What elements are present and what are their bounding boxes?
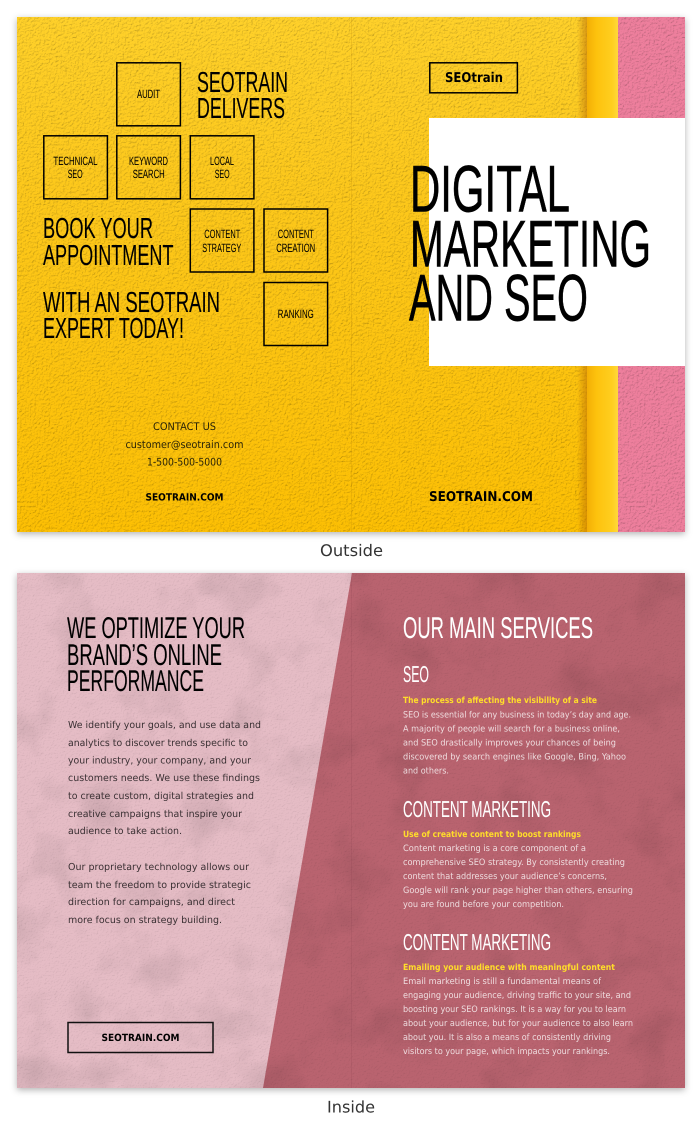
caption: outside: Outside bbox=[320, 541, 383, 560]
service box: technical SEO bbox=[44, 136, 107, 199]
contact details bbox=[126, 421, 244, 468]
heading: we optimize: BRAND’S ONLINE bbox=[67, 639, 222, 672]
heading: we optimize: PERFORMANCE bbox=[67, 665, 204, 698]
heading: SEOtrain delivers: DELIVERS bbox=[197, 93, 285, 125]
body copy: technology: Our proprietary technology allows our bbox=[68, 862, 249, 873]
service: email marketing: about your audience, but for your audience to also learn bbox=[403, 1019, 633, 1029]
website box bbox=[68, 1022, 213, 1052]
service: SEO: SEO bbox=[403, 661, 429, 687]
service box: content creation bbox=[264, 209, 328, 272]
service box: content strategy bbox=[190, 209, 254, 272]
contact details: CONTACT US bbox=[153, 421, 216, 433]
service: content marketing: comprehensive SEO strategy. By consistently creating bbox=[403, 858, 625, 868]
caption: inside: Inside bbox=[327, 1098, 375, 1116]
website, front panel: SEOTRAIN.COM bbox=[429, 489, 533, 505]
service: content marketing bbox=[403, 796, 633, 910]
title bbox=[409, 152, 651, 334]
website box: SEOTRAIN.COM bbox=[102, 1033, 180, 1044]
service: content marketing: Google will rank your page higher than others, ensuring bbox=[403, 886, 633, 896]
service box: technical SEO: TECHNICAL bbox=[54, 154, 98, 168]
service box: keyword search: SEARCH bbox=[133, 167, 165, 181]
service box: keyword search: KEYWORD bbox=[129, 154, 168, 168]
body copy: technology bbox=[68, 862, 251, 926]
service: email marketing: visitors to your page, which impacts your rankings. bbox=[403, 1047, 610, 1057]
body copy: intro: to create custom, digital strategies and bbox=[68, 791, 254, 802]
body copy: intro: analytics to discover trends specific to bbox=[68, 738, 248, 749]
service box: audit bbox=[117, 63, 180, 126]
service box: ranking: RANKING bbox=[278, 307, 314, 321]
body copy: technology: team the freedom to provide strategic bbox=[68, 880, 251, 891]
service: content marketing: you are found before your competition. bbox=[403, 900, 564, 910]
service: content marketing: Use of creative content to boost rankings bbox=[403, 830, 581, 840]
panel: inside spread bbox=[17, 573, 685, 1090]
white title block bbox=[429, 118, 685, 366]
body copy: intro: creative campaigns that inspire your bbox=[68, 809, 242, 820]
service: SEO: and others. bbox=[403, 766, 449, 776]
call to action: WITH AN SEOTRAIN bbox=[43, 287, 220, 319]
service: email marketing: about you. It is also a means of consistently driving bbox=[403, 1033, 611, 1043]
contact details: 1-500-500-5000 bbox=[147, 456, 222, 468]
contact details: customer@seotrain.com bbox=[126, 439, 244, 451]
service box: content strategy: STRATEGY bbox=[202, 241, 241, 255]
service box: ranking bbox=[264, 282, 328, 346]
service box: local SEO bbox=[190, 136, 254, 199]
service: SEO: and SEO drastically improves your chances of being bbox=[403, 738, 616, 748]
body copy: intro: audience to take action. bbox=[68, 826, 182, 837]
service: SEO: SEO is essential for any business in today’s day and age. bbox=[403, 710, 631, 720]
service: SEO: A majority of people will search for a business online, bbox=[403, 724, 620, 734]
heading: SEOtrain delivers bbox=[197, 67, 288, 125]
title: AND SEO bbox=[409, 260, 588, 334]
service: content marketing: Content marketing is a core component of a bbox=[403, 844, 586, 854]
service: email marketing: boosting your SEO rankings. It is a way for you to learn bbox=[403, 1005, 626, 1015]
title: DIGITAL bbox=[410, 152, 570, 226]
service box: content creation: CREATION bbox=[276, 241, 315, 255]
logo box: SEOtrain bbox=[445, 70, 503, 86]
body copy: intro: your industry, your company, and your bbox=[68, 756, 251, 766]
website, back panel: SEOTRAIN.COM bbox=[146, 492, 224, 504]
service: email marketing: Email marketing is still a fundamental means of bbox=[403, 977, 602, 987]
service: SEO: discovered by search engines like Google, Bing, Yahoo bbox=[403, 752, 626, 762]
service: email marketing bbox=[403, 929, 633, 1057]
service: content marketing: content that addresses your audience’s concerns, bbox=[403, 872, 607, 882]
heading: SEOtrain delivers: SEOTRAIN bbox=[197, 67, 288, 99]
body copy: intro: customers needs. We use these findings bbox=[68, 773, 260, 784]
service box: local SEO: LOCAL bbox=[210, 154, 234, 168]
call to action bbox=[43, 213, 220, 345]
panel: outside cover bbox=[17, 17, 685, 534]
heading: we optimize bbox=[67, 612, 245, 698]
service: content marketing: CONTENT MARKETING bbox=[403, 796, 551, 822]
service: email marketing: engaging your audience, driving traffic to your site, and bbox=[403, 991, 631, 1001]
service box: content creation: CONTENT bbox=[278, 227, 314, 241]
body copy: intro bbox=[68, 720, 261, 837]
service box: content strategy: CONTENT bbox=[204, 227, 241, 241]
service box: keyword search bbox=[117, 136, 180, 199]
service: email marketing: Emailing your audience with meaningful content bbox=[403, 963, 615, 973]
call to action: EXPERT TODAY! bbox=[43, 313, 184, 345]
body copy: technology: more focus on strategy building. bbox=[68, 915, 222, 926]
service: SEO: The process of affecting the visibility of a site bbox=[403, 696, 597, 706]
service: email marketing: CONTENT MARKETING bbox=[403, 929, 551, 955]
logo box bbox=[430, 63, 517, 93]
call to action: APPOINTMENT bbox=[43, 240, 174, 272]
call to action: BOOK YOUR bbox=[43, 213, 153, 245]
service box: local SEO: SEO bbox=[215, 167, 230, 181]
heading: we optimize: WE OPTIMIZE YOUR bbox=[67, 612, 245, 645]
service box: technical SEO: SEO bbox=[68, 167, 83, 181]
service box: audit: AUDIT bbox=[137, 87, 160, 101]
body copy: intro: We identify your goals, and use data and bbox=[68, 720, 261, 731]
service: SEO bbox=[403, 661, 631, 776]
body copy: technology: direction for campaigns, and direct bbox=[68, 897, 235, 908]
